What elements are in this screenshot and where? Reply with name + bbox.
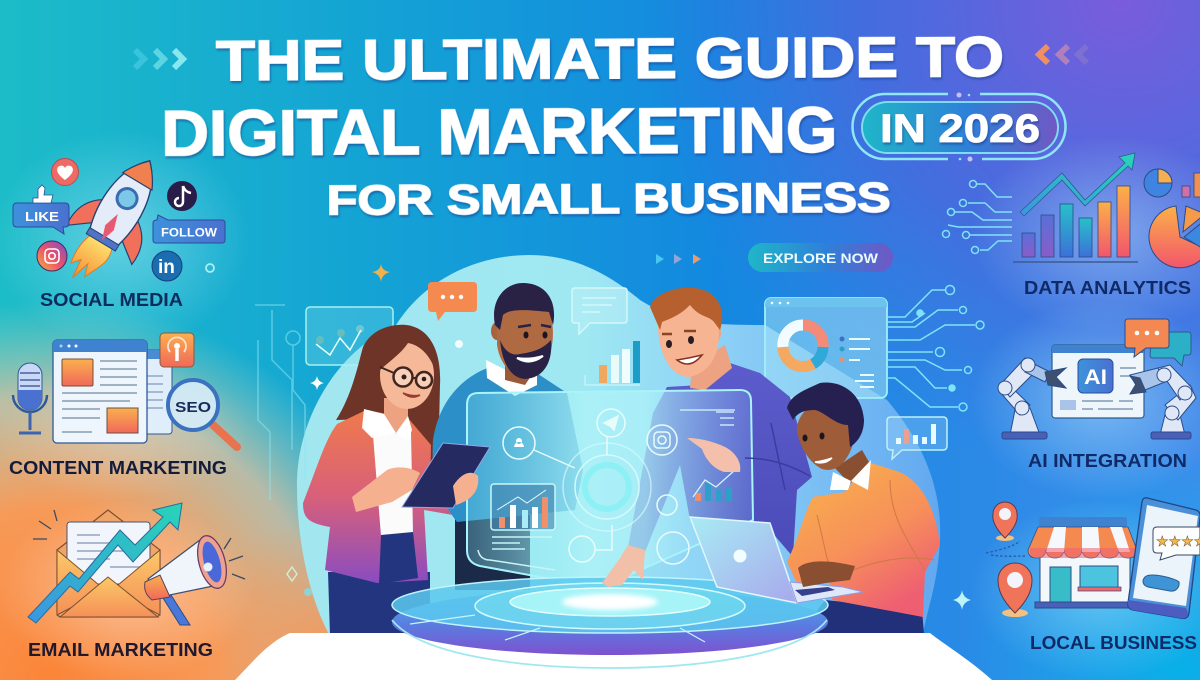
- woman tablet: [402, 443, 490, 508]
- in 2026 badge: IN 2026: [880, 107, 1040, 151]
- analytics bars: [1022, 186, 1130, 257]
- man collar: [486, 360, 537, 396]
- title: [161, 25, 1005, 224]
- robot arm right: [1130, 365, 1196, 439]
- small pie chart: [1144, 169, 1172, 197]
- title chevrons right: [1039, 46, 1087, 63]
- sparkles: [206, 264, 971, 610]
- right circuit lines: [887, 286, 984, 411]
- man in blue sweater: [433, 283, 583, 590]
- man in purple sweater: [628, 288, 812, 557]
- title chevrons left: [135, 50, 183, 68]
- woman neck: [384, 398, 408, 433]
- icon: SEO magnifier: [168, 380, 237, 447]
- icon: linkedin: [152, 251, 182, 281]
- title: THE ULTIMATE GUIDE TO: [216, 25, 1004, 93]
- panel text lines: [478, 537, 555, 570]
- icon: tiktok: [167, 181, 197, 211]
- left circuit lines: [255, 305, 305, 500]
- data circuit: [942, 180, 1012, 254]
- label: data analytics: DATA ANALYTICS: [1024, 278, 1191, 298]
- purple man head: [709, 324, 721, 342]
- central glowing backdrop: [297, 255, 940, 636]
- label: email marketing: EMAIL MARKETING: [28, 640, 213, 660]
- panel: data analytics: [942, 153, 1200, 298]
- icon: microphone: [13, 363, 47, 433]
- woman trousers: [328, 572, 430, 636]
- orange sweater: [787, 462, 940, 617]
- man sweater: [433, 367, 583, 522]
- woman face: [380, 341, 434, 409]
- laptop: [690, 517, 863, 603]
- icon: instagram: [37, 241, 67, 271]
- icon: podcast: [160, 333, 194, 367]
- orange man neck: [835, 450, 869, 484]
- location pin small: [993, 502, 1017, 541]
- explore now button: [748, 243, 893, 272]
- explore now button: EXPLORE NOW: [763, 251, 878, 266]
- icon: like bubble: LIKE: [25, 210, 59, 224]
- holographic panel: [467, 390, 810, 588]
- icon: growth arrow: [28, 503, 182, 623]
- icon: envelope: [57, 510, 160, 617]
- panel: social media: [13, 141, 225, 310]
- ai screen: AI: [1084, 366, 1107, 389]
- pointing hand: [687, 438, 740, 472]
- storefront: [1028, 517, 1137, 608]
- orange chat bubble: [428, 282, 477, 321]
- play triangles: [656, 254, 701, 264]
- small bars: [1182, 173, 1200, 197]
- man hand on platform: [602, 545, 645, 587]
- woman hair back: [336, 325, 440, 470]
- label: ai integration: AI INTEGRATION: [1028, 451, 1187, 471]
- analytics arrow: [1020, 153, 1135, 216]
- robot arm left: [998, 358, 1066, 439]
- man trousers: [455, 515, 530, 590]
- panel: email marketing: [28, 503, 245, 660]
- icon: linkedin: in: [158, 257, 175, 278]
- orange man collar: [830, 460, 871, 490]
- label: social media: SOCIAL MEDIA: [40, 290, 183, 310]
- glass chat window: [572, 288, 627, 334]
- title: DIGITAL MARKETING: [161, 94, 837, 169]
- woman shirt: [373, 432, 413, 536]
- glass bar chart: [585, 341, 640, 385]
- white table: [235, 633, 992, 680]
- review bubble: [1153, 527, 1200, 560]
- label: local business: LOCAL BUSINESS: [1030, 633, 1197, 653]
- typing hand: [798, 561, 855, 587]
- orange man head: [797, 398, 855, 470]
- panel chart: [491, 484, 555, 530]
- glass small chart bubble: [887, 417, 947, 459]
- woman forearm and hand: [352, 467, 420, 512]
- man in orange sweater: [787, 383, 940, 634]
- purple sweater: [628, 363, 812, 557]
- in 2026 badge: [852, 92, 1066, 162]
- purple man neck: [690, 345, 732, 390]
- email burst marks: [33, 510, 245, 579]
- chat bubbles: [1125, 319, 1191, 366]
- panel: ai integration: [998, 319, 1196, 471]
- navy trousers: [800, 600, 924, 634]
- phone: [1128, 498, 1200, 618]
- hub rings: [563, 443, 651, 531]
- icon: SEO magnifier: SEO: [175, 399, 211, 416]
- left analytics window: [306, 307, 393, 365]
- dotted route: [986, 541, 1026, 556]
- panel: content marketing: [9, 333, 237, 478]
- panel right chart: [680, 410, 735, 501]
- man head: [505, 360, 535, 385]
- icon: rocket: [45, 141, 183, 301]
- icon: like bubble: [13, 185, 69, 234]
- icon: follow bubble: FOLLOW: [161, 226, 218, 240]
- icon: heart: [52, 158, 78, 186]
- icon: back page: [130, 350, 172, 434]
- panel icons: [503, 409, 689, 564]
- big pie chart: [1149, 206, 1200, 268]
- woman: [303, 325, 458, 636]
- location pin large: [998, 563, 1032, 617]
- label: content marketing: CONTENT MARKETING: [9, 458, 227, 478]
- icon: megaphone: [145, 533, 232, 625]
- woman collar: [362, 409, 412, 440]
- glass donut window: [765, 298, 887, 398]
- woman jacket: [303, 410, 458, 583]
- woman hand on tablet: [453, 473, 478, 505]
- title: FOR SMALL BUSINESS: [327, 174, 891, 223]
- icon: follow bubble: [153, 215, 225, 243]
- holographic platform: [392, 577, 828, 668]
- icon: document: [53, 340, 147, 443]
- panel: local business: [986, 498, 1200, 653]
- ai screen: [1052, 345, 1144, 418]
